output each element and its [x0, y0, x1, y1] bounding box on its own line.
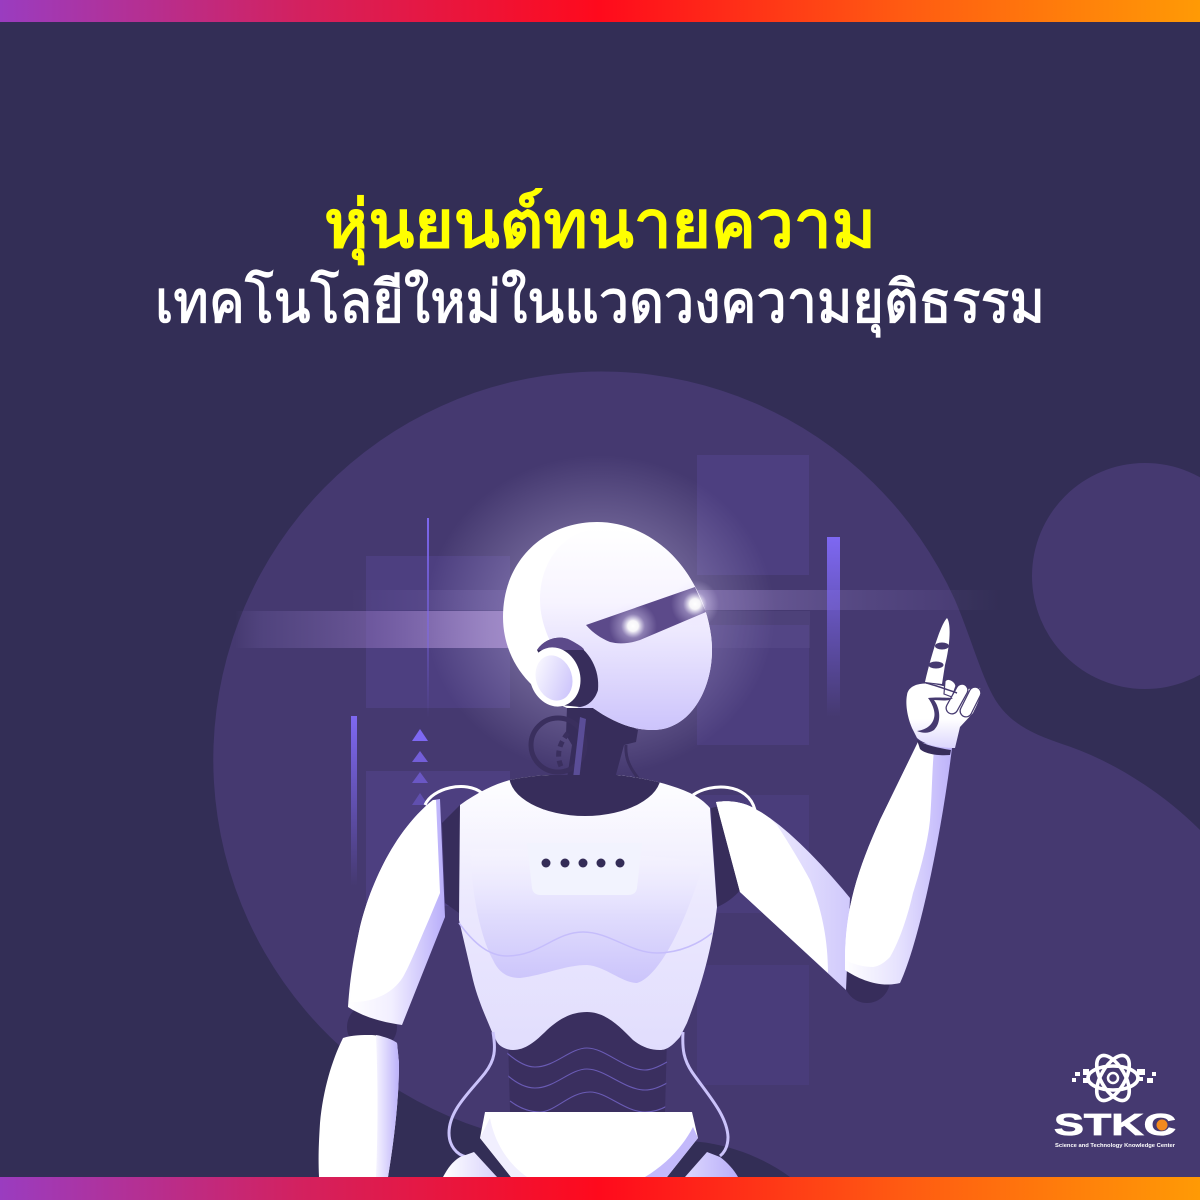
- title: หุ่นยนต์ทนายความ: [324, 187, 876, 266]
- eye lights: [611, 582, 716, 644]
- small background circle: [1032, 463, 1200, 689]
- robot legs: [443, 1152, 738, 1177]
- top gradient bar: [0, 0, 1200, 22]
- robot left upper arm: [348, 799, 445, 1025]
- subtitle: เทคโนโลยีใหม่ในแวดวงความยุติธรรม: [155, 269, 1045, 338]
- robot hand pointing: [906, 618, 980, 755]
- logo wordmark: STKC: [1054, 1107, 1176, 1142]
- vertical accent lines: [351, 518, 840, 886]
- logo atom icon: [1088, 1050, 1138, 1106]
- background blob shape: [213, 371, 1200, 1177]
- robot side cables: [449, 1032, 728, 1157]
- robot head: [503, 522, 720, 740]
- robot left forearm: [319, 1035, 399, 1177]
- background tech panels: [366, 455, 809, 1085]
- logo tagline: Science and Technology Knowledge Center: [1055, 1143, 1175, 1149]
- robot hips: [480, 1112, 698, 1177]
- logo pixel squares: [1072, 1069, 1156, 1083]
- shoulder shadows and wires: [425, 787, 755, 913]
- robot right upper arm: [716, 801, 850, 990]
- ear: [531, 638, 598, 707]
- robot: [319, 522, 980, 1177]
- robot waist: [507, 1012, 668, 1112]
- STKC logo: [1054, 1050, 1176, 1149]
- bottom gradient bar: [0, 1177, 1200, 1200]
- triangle arrows: [412, 729, 428, 805]
- visor: [586, 587, 706, 643]
- robot elbow joints: [347, 972, 890, 1040]
- robot right forearm: [845, 742, 952, 985]
- light streak bands: [235, 590, 1000, 648]
- robot neck: [528, 708, 639, 778]
- logo orange dot: [1156, 1120, 1168, 1130]
- robot torso: [458, 775, 717, 1050]
- head glow: [425, 455, 775, 775]
